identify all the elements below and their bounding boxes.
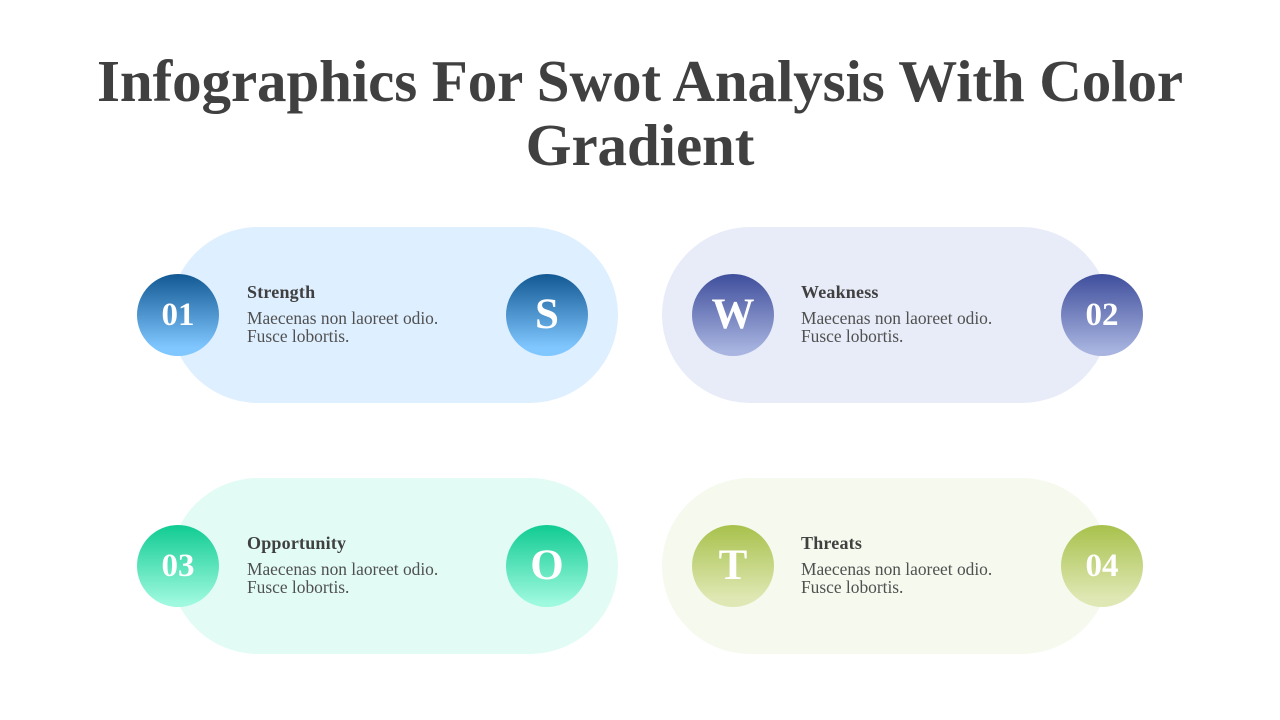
text block: threats: Fusce lobortis. [801,577,903,597]
icon: number 03 [137,525,219,607]
icon: number 04 [1061,525,1143,607]
icon: letter O: O [530,542,564,589]
title: Gradient [526,112,754,178]
panel: opportunity [137,478,618,654]
title [97,48,1183,178]
text block: weakness: Maecenas non laoreet odio. [801,308,992,328]
text block: threats: Threats [801,533,862,553]
title: Infographics For Swot Analysis With Color [97,48,1183,114]
text block: weakness: Weakness [801,282,879,302]
icon: number 01: 01 [162,297,194,333]
panel background [662,227,1110,403]
panel background [662,478,1110,654]
panel background [170,478,618,654]
text block: strength: Fusce lobortis. [247,326,349,346]
text block: weakness [801,282,992,346]
text block: strength: Maecenas non laoreet odio. [247,308,438,328]
icon: number 01 [137,274,219,356]
icon: letter T [692,525,774,607]
panel background [170,227,618,403]
panel: strength [137,227,618,403]
icon: number 02: 02 [1086,297,1118,333]
text block: opportunity: Opportunity [247,533,346,553]
icon: letter S: S [535,291,559,338]
icon: number 03: 03 [162,548,194,584]
text block: threats: Maecenas non laoreet odio. [801,559,992,579]
text block: opportunity [247,533,438,597]
icon: letter O [506,525,588,607]
icon: number 04: 04 [1086,548,1118,584]
text block: opportunity: Fusce lobortis. [247,577,349,597]
icon: letter W [692,274,774,356]
text block: opportunity: Maecenas non laoreet odio. [247,559,438,579]
icon: letter S [506,274,588,356]
icon: letter T: T [719,542,747,589]
text block: strength [247,282,438,346]
icon: letter W: W [712,291,754,338]
text block: threats [801,533,992,597]
panel: weakness [662,227,1143,403]
icon: number 02 [1061,274,1143,356]
text block: weakness: Fusce lobortis. [801,326,903,346]
panel: threats [662,478,1143,654]
text block: strength: Strength [247,282,315,302]
